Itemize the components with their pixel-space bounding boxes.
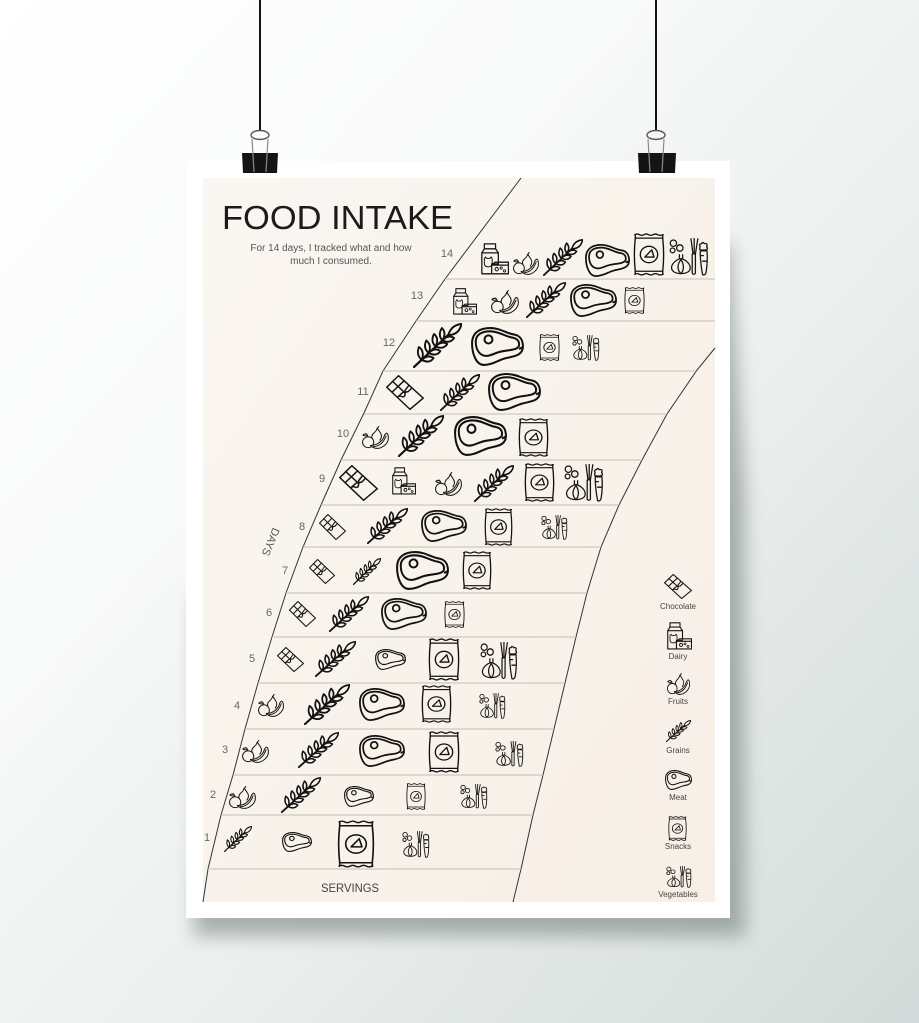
right binder clip and wire: [638, 0, 676, 173]
row: day 5: [278, 639, 517, 680]
day numbers: 5: [249, 653, 255, 665]
legend: snacks: Snacks: [665, 842, 691, 851]
legend: chocolate: [660, 574, 697, 611]
legend: [658, 574, 698, 899]
row: day 10: [363, 416, 548, 456]
row: day 3: [243, 732, 523, 772]
days axis label: DAYS: [259, 526, 281, 557]
legend: vegetables: Vegetables: [658, 890, 698, 899]
day numbers: 6: [266, 607, 272, 619]
row: day 1: [225, 821, 429, 867]
right axis curve: [513, 348, 715, 902]
subtitle: For 14 days, I tracked what and how: [250, 243, 412, 254]
legend: chocolate: Chocolate: [660, 602, 697, 611]
poster artwork panel: [203, 178, 715, 902]
day numbers: [204, 248, 453, 844]
row: day 13: [454, 283, 644, 317]
row: day 14: [482, 234, 708, 276]
day numbers: 3: [222, 744, 228, 756]
legend: fruits: [667, 673, 690, 706]
legend: vegetables: [658, 866, 698, 899]
legend: meat: Meat: [669, 793, 688, 802]
row: day 8: [320, 509, 567, 545]
day numbers: 7: [282, 565, 288, 577]
row divider lines: [208, 279, 715, 869]
row: day 6: [290, 597, 464, 631]
legend: dairy: [668, 623, 692, 661]
day numbers: 12: [383, 337, 395, 349]
day numbers: 14: [441, 248, 453, 260]
left binder clip and wire: [242, 0, 278, 173]
poster shadow: [194, 240, 745, 936]
day numbers: 11: [357, 386, 369, 398]
legend: meat: [666, 771, 691, 802]
day numbers: 2: [210, 789, 216, 801]
subtitle: much I consumed.: [290, 256, 372, 267]
row: day 7: [310, 552, 491, 589]
legend: snacks: [665, 817, 691, 851]
day numbers: 13: [411, 290, 423, 302]
row: day 11: [387, 374, 540, 410]
day numbers: 8: [299, 521, 305, 533]
title: FOOD INTAKE: [222, 199, 453, 236]
day numbers: 4: [234, 700, 240, 712]
row: day 12: [414, 324, 599, 367]
day numbers: 9: [319, 473, 325, 485]
row: day 4: [259, 685, 505, 724]
legend: grains: [666, 720, 691, 755]
left axis curve: [203, 178, 521, 902]
day numbers: 1: [204, 832, 210, 844]
legend: fruits: Fruits: [668, 697, 688, 706]
servings axis label: SERVINGS: [321, 881, 379, 895]
legend: grains: Grains: [666, 746, 690, 755]
row: day 2: [230, 778, 487, 812]
legend: dairy: Dairy: [669, 652, 687, 661]
day numbers: 10: [337, 428, 349, 440]
row: day 9: [340, 464, 602, 501]
poster sheet: [186, 161, 730, 918]
